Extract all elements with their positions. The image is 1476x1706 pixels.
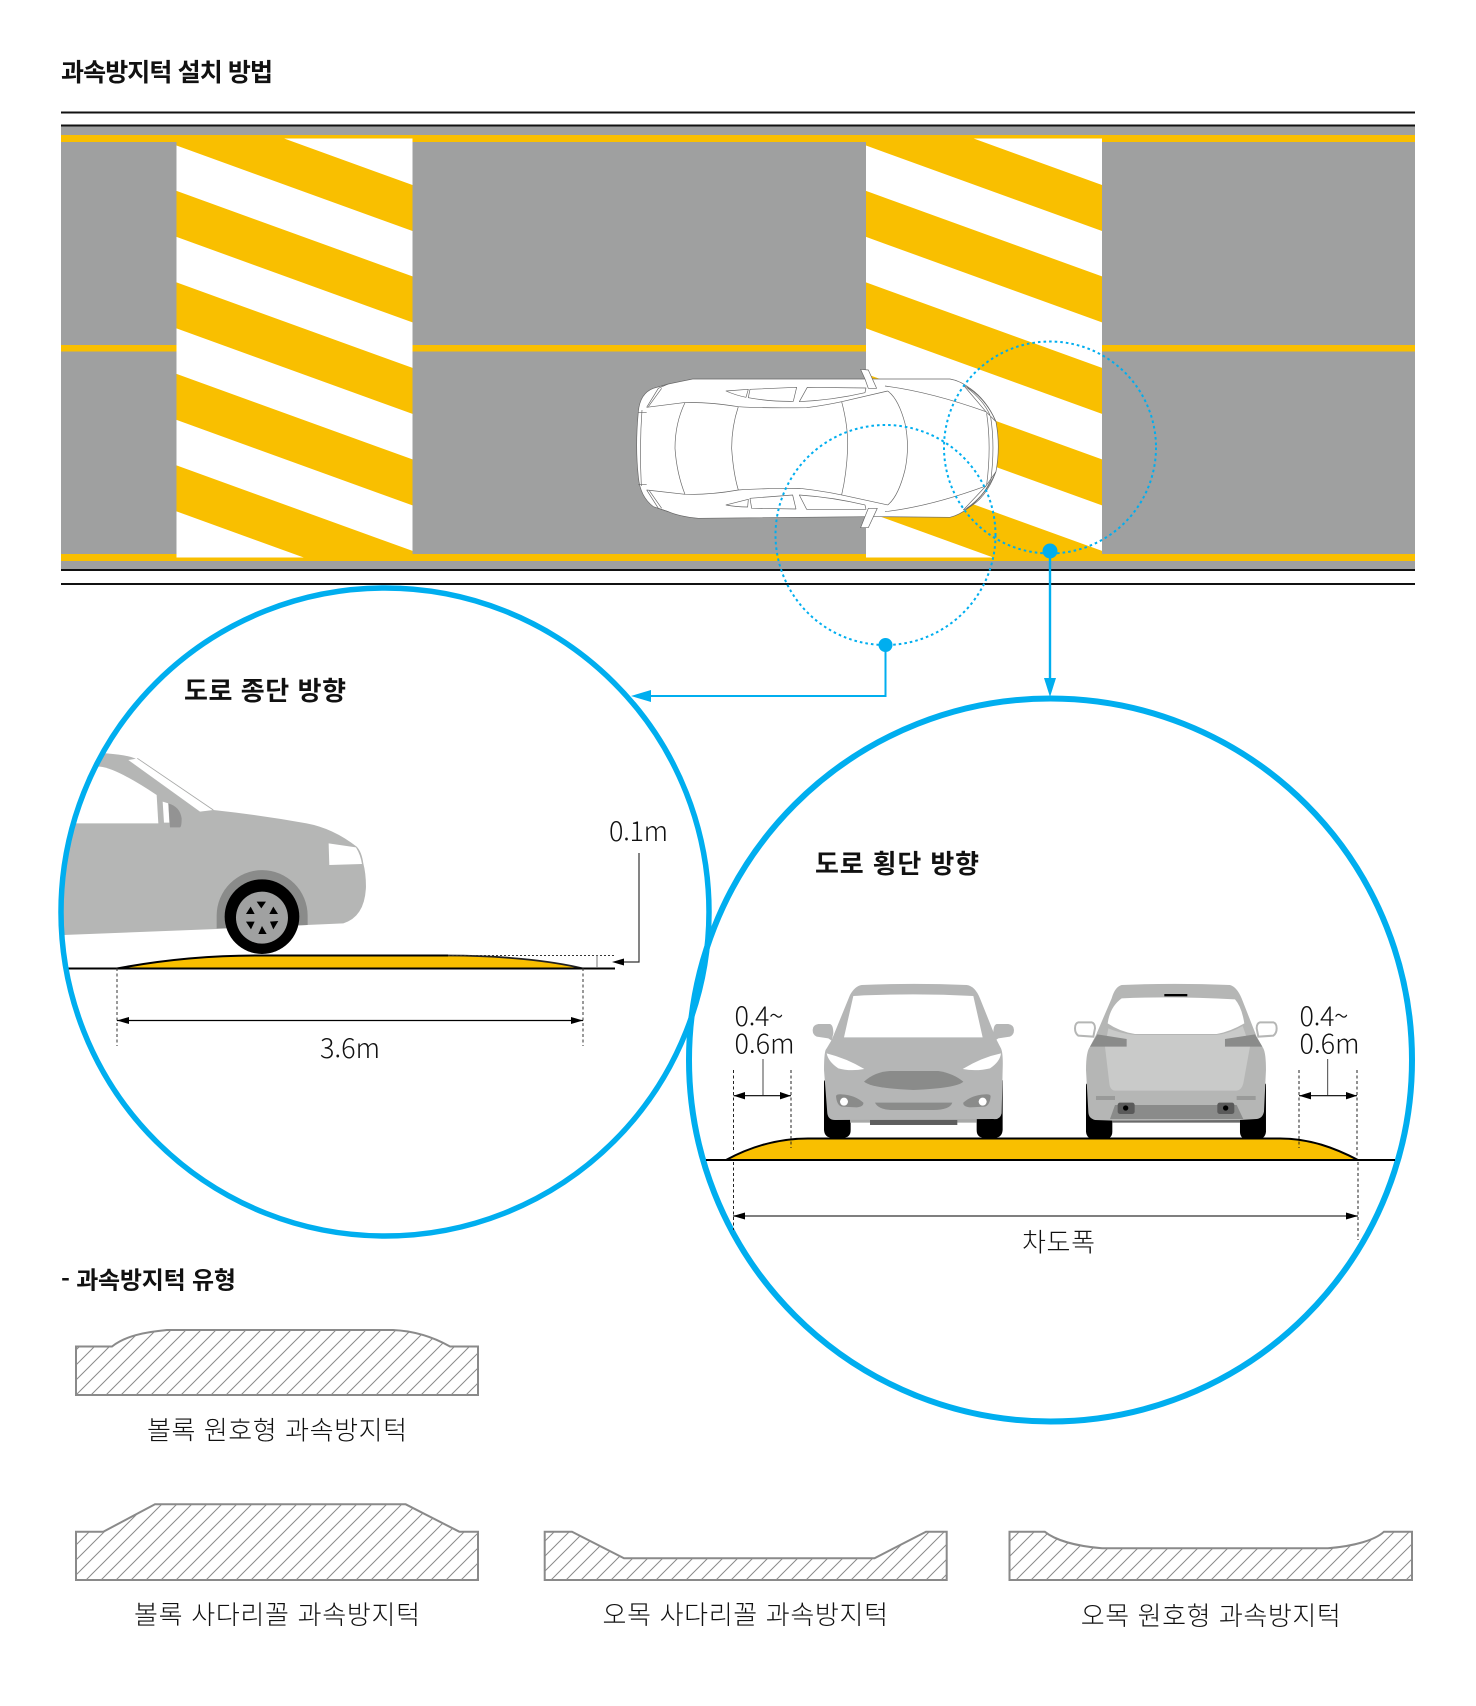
type: concave arc: 오목 원호형 과속방지턱 [1081, 1596, 1341, 1633]
label: left margin [734, 995, 794, 1062]
label: height 0.1m: 0.1m [609, 810, 668, 849]
arrow to cross detail [1042, 544, 1058, 697]
arrow to longitudinal detail [631, 638, 892, 702]
circle outline: longitudinal [61, 588, 709, 1236]
type: concave arc [1010, 1532, 1412, 1633]
label: length 3.6m: 3.6m [320, 1027, 380, 1066]
type: concave trapezoid: 오목 사다리꼴 과속방지턱 [602, 1595, 888, 1632]
heading: bump types: - 과속방지턱 유형 [61, 1260, 236, 1296]
type: convex trapezoid: 볼록 사다리꼴 과속방지턱 [134, 1595, 420, 1632]
road plan view [61, 100, 1415, 597]
cross-section bump diagram [706, 1059, 1395, 1240]
dotted detail circle: longitudinal direction [776, 425, 996, 645]
circle outline: cross direction [689, 698, 1412, 1422]
type: concave trapezoid [545, 1532, 947, 1632]
label: right margin [1300, 995, 1360, 1062]
speed bump marking 1 [176, 138, 412, 558]
heading: longitudinal direction: 도로 종단 방향 [184, 671, 346, 708]
label: lane width: 차도폭 [1022, 1222, 1095, 1260]
label: right margin: 0.6m [1300, 1022, 1360, 1062]
car top view [637, 369, 998, 528]
dotted detail circle: cross direction [944, 342, 1156, 554]
type: convex arc [76, 1330, 478, 1448]
label: left margin: 0.4~ [734, 995, 784, 1034]
longitudinal bump diagram [68, 853, 639, 1046]
type: convex trapezoid [76, 1504, 478, 1632]
type: convex arc: 볼록 원호형 과속방지턱 [147, 1410, 407, 1448]
front view car [813, 984, 1014, 1138]
speed bump marking 2 [866, 138, 1102, 558]
rear view car [1075, 984, 1277, 1139]
heading: cross direction: 도로 횡단 방향 [815, 844, 979, 881]
title: 과속방지턱 설치 방법 [61, 53, 273, 89]
label: left margin: 0.6m [734, 1022, 794, 1062]
side view car [60, 753, 366, 954]
yellow road lines [61, 135, 1415, 561]
label: right margin: 0.4~ [1300, 995, 1348, 1034]
